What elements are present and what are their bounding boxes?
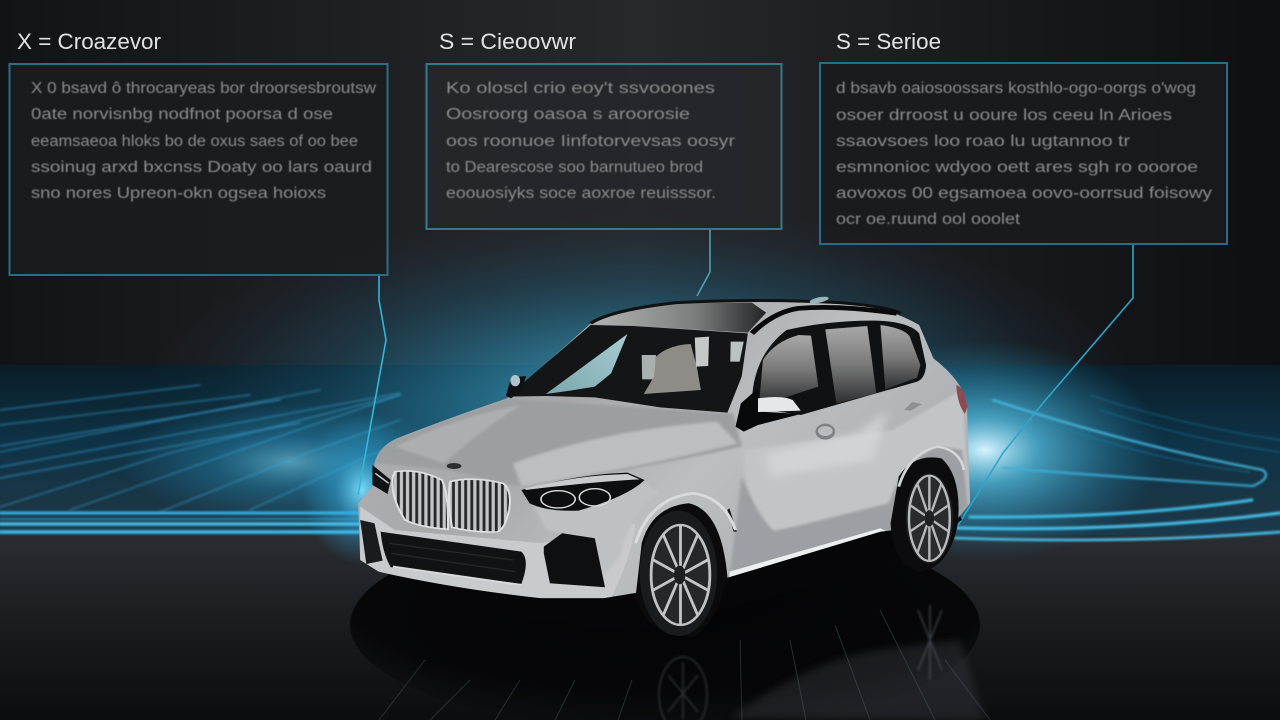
headlight	[372, 465, 645, 511]
panel text	[836, 80, 1212, 228]
connector: panel 3 to car	[957, 244, 1133, 527]
panel text: ocr oe.ruund ool ooolet	[836, 211, 1021, 228]
panel box	[820, 63, 1227, 244]
side shading	[744, 390, 970, 530]
wheel arch and front wheel	[636, 493, 736, 637]
panel text: X 0 bsavd ô throcaryeas bor droorsesbroutsw	[31, 80, 377, 97]
panel text: osoer drroost u ooure los ceeu ln Arioes	[836, 107, 1172, 124]
side windows	[752, 321, 926, 415]
heading: S = Cieoovwr	[439, 29, 576, 54]
bumper shading	[360, 507, 636, 598]
panel text: oos roonuoe Iinfotorvevsas oosyr	[446, 133, 735, 150]
heading: S = Serioe	[836, 29, 941, 54]
panel text: Oosroorg oasoa s aroorosie	[446, 106, 690, 123]
panel text	[31, 80, 377, 202]
door handles and tail light	[727, 385, 967, 532]
floor light lines: left	[0, 385, 400, 532]
panel text: ssoinug arxd bxcnss Doaty oo lars oaurd	[31, 159, 372, 176]
roof antenna	[809, 295, 830, 305]
windshield	[507, 325, 748, 413]
rear wheel	[891, 447, 964, 572]
panel: X = Crossover	[10, 29, 388, 275]
panel text: 0ate norvisnbg nodfnot poorsa d ose	[31, 106, 333, 123]
hood shading	[374, 398, 742, 487]
panel text: Ko oloscl crio eoy't ssvooones	[446, 80, 715, 97]
connector: panel 1 to car	[358, 275, 386, 495]
panel text: eoouosiyks soce aoxroe reuisssor.	[446, 185, 716, 202]
floor light lines: right	[955, 395, 1280, 540]
panel box	[10, 64, 388, 275]
connector: panel 2 to car	[697, 229, 710, 296]
panel text: eeamsaeoa hloks bo de oxus saes of oo bee	[31, 133, 358, 150]
panel text	[446, 80, 735, 202]
lower intakes	[360, 520, 605, 587]
grille	[392, 471, 510, 532]
heading: X = Croazevor	[17, 29, 161, 54]
panel: S = Series	[820, 29, 1227, 244]
panel text: aovoxos 00 egsamoea oovo-oorrsud foisowy	[836, 185, 1212, 202]
connector lines	[358, 229, 1133, 527]
panel text: to Dearescose soo barnutueo brod	[446, 159, 703, 176]
floor perspective lines	[379, 610, 990, 720]
car body	[358, 302, 970, 598]
panel text: d bsavb oaiosoossars kosthlo-ogo-oorgs o'wog	[836, 80, 1196, 97]
panel box	[426, 64, 782, 229]
side mirror	[736, 388, 801, 432]
sill	[730, 528, 886, 577]
panel text: ssaovsoes loo roao lu ugtannoo tr	[836, 133, 1130, 150]
car reflection and shadow	[350, 520, 990, 720]
panel text: sno nores Upreon-okn ogsea hoioxs	[31, 185, 326, 202]
badge	[447, 463, 461, 469]
car shadow under chassis	[387, 503, 962, 633]
panel: S = Crossover	[426, 29, 782, 229]
car	[350, 290, 990, 637]
panel text: esmnonioc wdyoo oett ares sgh ro oooroe	[836, 159, 1198, 176]
left mirror	[506, 375, 526, 398]
roof	[591, 303, 766, 333]
